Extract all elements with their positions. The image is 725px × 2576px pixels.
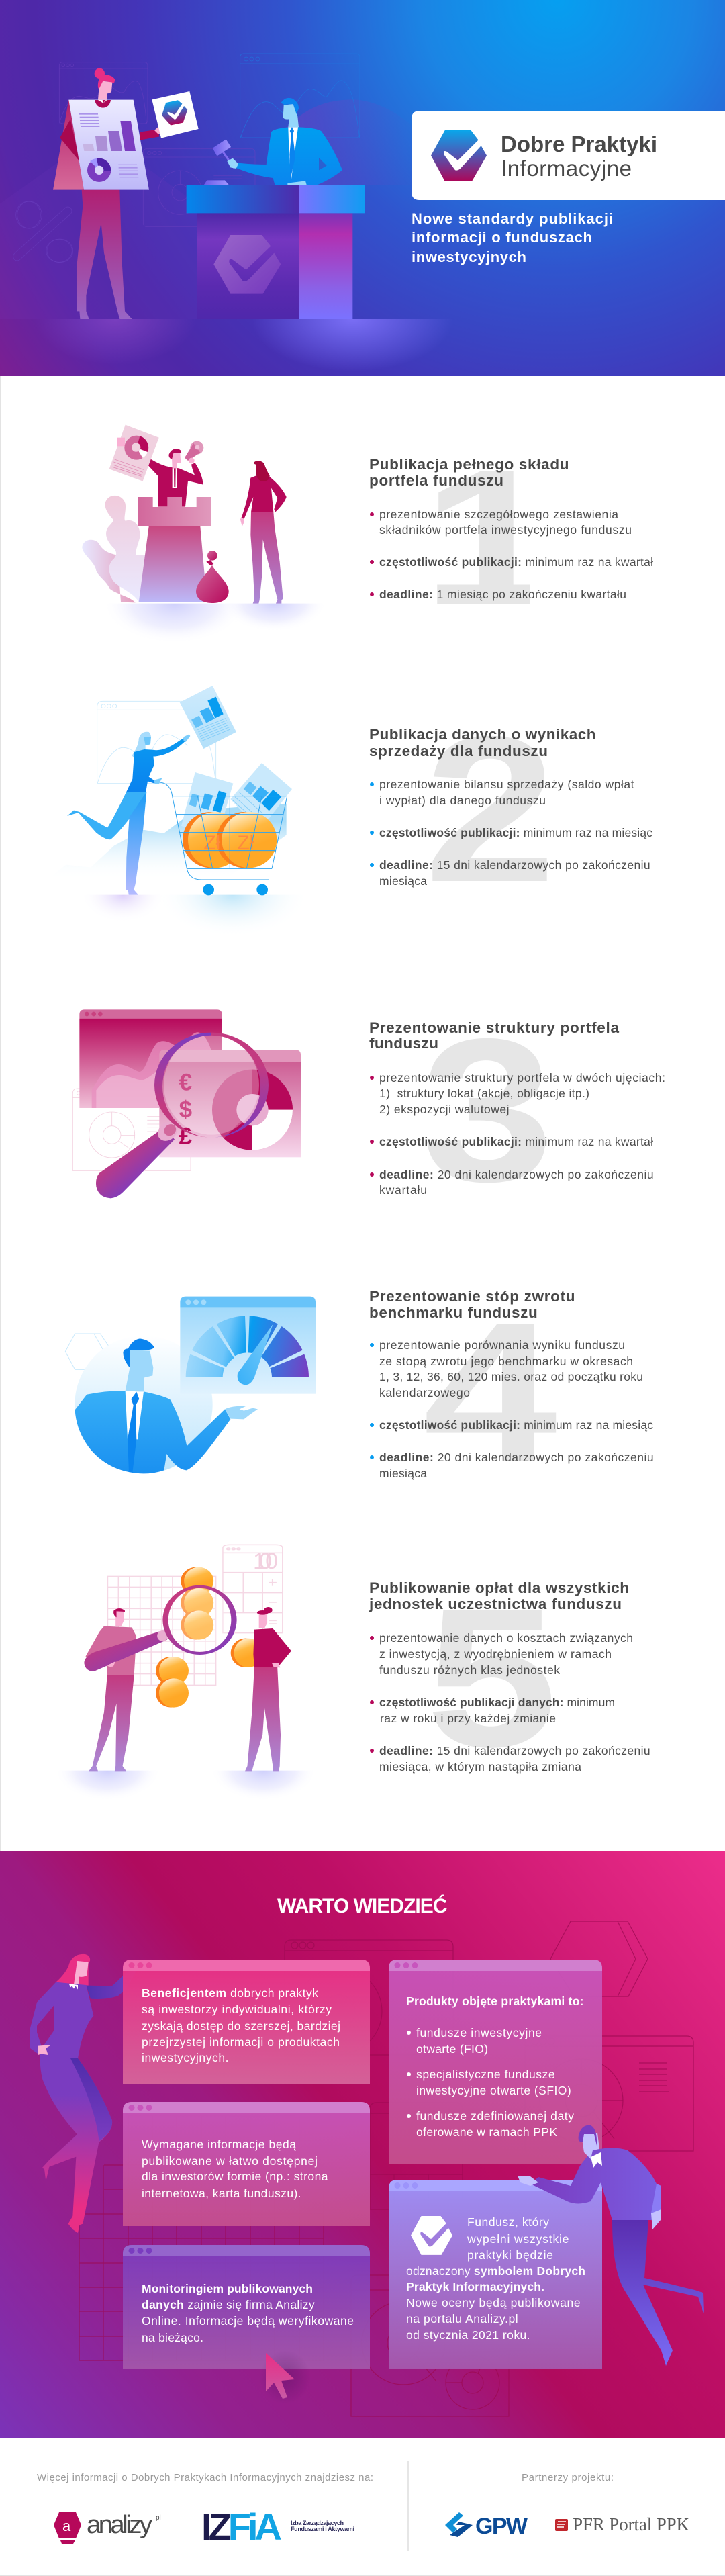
card: produkty: inwestycyjne otwarte (SFIO) xyxy=(416,2084,571,2097)
floor glow xyxy=(124,603,311,633)
tower xyxy=(139,526,207,602)
text: section 3: funduszu xyxy=(369,1035,438,1052)
logo: gpw: GPW xyxy=(475,2514,528,2539)
speaker xyxy=(148,459,203,507)
card: wymagane informacje: internetowa, karta funduszu). xyxy=(142,2187,301,2200)
badge card xyxy=(152,91,199,138)
gauge window xyxy=(180,1297,316,1308)
card: beneficjentem: zyskają dostęp do szerszej, bardziej xyxy=(142,2019,340,2033)
text: section 5: częstotliwość publikacji danych: minimum xyxy=(379,1696,615,1709)
card: symbol: od stycznia 2021 roku. xyxy=(406,2328,530,2342)
text: section 2: częstotliwość publikacji: minimum raz na miesiąc xyxy=(379,826,652,839)
text: section 5: raz w roku i przy każdej zmianie xyxy=(380,1712,556,1725)
text: section 2: prezentowanie bilansu sprzedaży (saldo wpłat xyxy=(379,778,634,791)
text: section 1: prezentowanie szczegółowego zestawienia xyxy=(379,508,618,521)
footer text left: Więcej informacji o Dobrych Praktykach Informacyjnych znajdziesz na: xyxy=(37,2472,373,2483)
cart xyxy=(159,782,287,880)
logo wordmark xyxy=(501,132,657,181)
card: symbol xyxy=(389,2180,602,2369)
calculator value: 100 xyxy=(253,1549,278,1574)
illustration: man with gauge xyxy=(65,1297,316,1473)
text: section 4: Prezentowanie stóp zwrotu xyxy=(369,1288,575,1305)
text: section 3: deadline: 20 dni kalendarzowych po zakończeniu xyxy=(379,1168,654,1181)
lens glass xyxy=(164,1036,259,1135)
man xyxy=(126,1350,153,1391)
text: section 3: częstotliwość publikacji: minimum raz na kwartał xyxy=(379,1135,653,1148)
text: section 3: kwartału xyxy=(379,1183,427,1197)
logo: izfia: IZFiA xyxy=(201,2505,282,2548)
logo: izfia: Funduszami i Aktywami xyxy=(291,2526,354,2532)
text: section 1: Publikacja pełnego składu xyxy=(369,456,569,473)
text: section 1 xyxy=(369,456,653,601)
coins xyxy=(181,1567,211,1595)
floor glow xyxy=(98,894,282,923)
panel: warto wiedzieć xyxy=(0,1851,725,2438)
text: section 5: z inwestycją, z wyodrębnieniem w ramach xyxy=(379,1647,612,1661)
card: beneficjentem: inwestycyjnych. xyxy=(142,2051,228,2064)
donut window xyxy=(159,1050,301,1062)
floor glow xyxy=(56,319,440,364)
card: symbol: Fundusz, który xyxy=(467,2215,549,2229)
logo wordmark: Informacyjne xyxy=(501,156,632,181)
logo: izfia xyxy=(201,2505,354,2548)
text: section 5: deadline: 15 dni kalendarzowych po zakończeniu xyxy=(379,1744,650,1757)
footer text right: Partnerzy projektu: xyxy=(522,2472,614,2483)
card: produkty xyxy=(389,1960,602,2164)
numeral 3: 3 xyxy=(422,996,554,1224)
text: section 2 xyxy=(369,726,652,888)
numeral 5: 5 xyxy=(426,1567,558,1788)
text: section 5: prezentowanie danych o kosztach związanych xyxy=(379,1631,633,1645)
card: produkty: fundusze zdefiniowanej daty xyxy=(416,2109,574,2123)
logo: analizy: a xyxy=(62,2518,71,2534)
text: section 1: składników portfela inwestycyjnego funduszu xyxy=(379,523,632,537)
outline window xyxy=(72,1089,191,1170)
heading: WARTO WIEDZIEĆ xyxy=(277,1894,447,1917)
cursor icon xyxy=(260,2350,311,2404)
text: section 5 xyxy=(369,1579,650,1774)
chart window xyxy=(79,1009,222,1019)
currency symbols: £ xyxy=(179,1123,193,1149)
card: symbol: Nowe oceny będą publikowane xyxy=(406,2296,581,2309)
logo: analizy: analizy xyxy=(87,2511,152,2539)
logo: izfia: Izba Zarządzających xyxy=(291,2520,344,2526)
currency symbols: $ xyxy=(179,1097,192,1123)
card: beneficjentem: Beneficjentem dobrych praktyk xyxy=(142,1986,318,2000)
card: produkty: fundusze inwestycyjne xyxy=(416,2026,542,2039)
illustration: two people inspecting coins xyxy=(54,1545,317,1801)
panel: footer xyxy=(0,2461,725,2576)
hero subtitle xyxy=(412,210,613,265)
outline grid xyxy=(107,1576,216,1685)
text: section 5: jednostek uczestnictwa funduszu xyxy=(369,1596,622,1612)
logo: pfr portal ppk: PFR Portal PPK xyxy=(573,2514,690,2534)
money bag xyxy=(207,551,218,561)
text: section 1: deadline: 1 miesiąc po zakończeniu kwartału xyxy=(379,588,626,601)
text: section 3: 2) ekspozycji walutowej xyxy=(379,1103,509,1116)
text: section 3 xyxy=(369,1019,665,1197)
text: section 4: 1, 3, 12, 36, 60, 120 mies. oraz od początku roku xyxy=(379,1370,643,1383)
illustration: magnifier over windows xyxy=(72,1009,301,1198)
text: section 5: Publikowanie opłat dla wszystkich xyxy=(369,1579,629,1596)
floating sheet xyxy=(180,686,236,749)
card: symbol: wypełni wszystkie xyxy=(467,2232,569,2246)
card: produkty: Produkty objęte praktykami to: xyxy=(406,1994,584,2008)
illustration: woman with shopping cart xyxy=(42,686,309,937)
card: symbol: Praktyk Informacyjnych. xyxy=(406,2280,544,2293)
magnifier xyxy=(84,1631,167,1671)
calculator window xyxy=(223,1545,283,1633)
card: symbol: na portalu Analizy.pl xyxy=(406,2312,518,2326)
text: section 4: prezentowanie porównania wyniku funduszu xyxy=(379,1338,625,1352)
text: section 4: deadline: 20 dni kalendarzowych po zakończeniu xyxy=(379,1451,654,1464)
shopper xyxy=(132,732,151,759)
hero subtitle: inwestycyjnych xyxy=(412,248,526,265)
man xyxy=(89,1675,134,1771)
text: section 1: portfela funduszu xyxy=(369,472,503,489)
card: wymagane informacje: dla inwestorów formie (np.: strona xyxy=(142,2170,328,2183)
logo: analizy: pl xyxy=(156,2514,161,2522)
card: monitoring: danych zajmie się firma Analizy xyxy=(142,2298,315,2311)
background window xyxy=(97,701,216,784)
woman xyxy=(245,1667,281,1771)
text: section 4 xyxy=(369,1288,654,1480)
logo: analizy xyxy=(54,2511,161,2544)
card: produkty: oferowane w ramach PPK xyxy=(416,2125,557,2139)
card: produkty: specjalistyczne fundusze xyxy=(416,2068,555,2081)
card: monitoring: Monitoringiem publikowanych xyxy=(142,2282,313,2295)
icon: white badge xyxy=(411,2216,452,2255)
card: beneficjentem xyxy=(123,1960,370,2084)
illustration: tower with speaker xyxy=(82,425,327,644)
text: section 4: częstotliwość publikacji: minimum raz na miesiąc xyxy=(379,1418,653,1432)
coins xyxy=(183,812,239,868)
card: monitoring: na bieżąco. xyxy=(142,2331,203,2344)
figure: man with gavel xyxy=(213,98,342,185)
card: monitoring: Online. Informacje będą weryfikowane xyxy=(142,2314,354,2328)
text: section 4: ze stopą zwrotu jego benchmarku w okresach xyxy=(379,1354,633,1368)
text: section 3: Prezentowanie struktury portfela xyxy=(369,1019,619,1036)
card: monitoring xyxy=(123,2245,370,2369)
text: section 2: Publikacja danych o wynikach xyxy=(369,726,596,743)
text: section 3: 1) struktury lokat (akcje, obligacje itp.) xyxy=(379,1087,589,1100)
card: wymagane informacje: publikowane w łatwo dostępnej xyxy=(142,2154,318,2168)
page edge xyxy=(0,376,1,1851)
hero background outlines xyxy=(0,54,421,319)
numeral 4: 4 xyxy=(423,1281,559,1503)
card: beneficjentem: są inwestorzy indywidualni, którzy xyxy=(142,2003,332,2016)
text: section 2: sprzedaży dla funduszu xyxy=(369,743,548,760)
hero subtitle: Nowe standardy publikacji xyxy=(412,210,613,227)
figure: woman xyxy=(30,1954,138,2233)
currency symbols xyxy=(179,1069,193,1149)
text: section 4: kalendarzowego xyxy=(379,1386,470,1399)
text: section 2: deadline: 15 dni kalendarzowych po zakończeniu xyxy=(379,858,650,872)
text: section 2: miesiąca xyxy=(379,874,427,888)
lens ring xyxy=(154,1033,269,1138)
icon: logo hexagon xyxy=(431,130,487,181)
card: symbol: odznaczony symbolem Dobrych xyxy=(406,2264,585,2278)
figure: man xyxy=(518,2125,704,2366)
background outlines xyxy=(79,1921,693,2416)
text: section 3: prezentowanie struktury portfela w dwóch ujęciach: xyxy=(379,1071,665,1085)
text: section 4: miesiąca xyxy=(379,1467,427,1480)
numeral 2: 2 xyxy=(424,694,557,925)
card: symbol: praktyki będzie xyxy=(467,2248,553,2262)
illustration: woman with shopping cart: Zł xyxy=(203,832,221,854)
floor glow xyxy=(70,1770,302,1792)
report sheet xyxy=(68,100,149,190)
magnifier handle xyxy=(96,1127,175,1198)
card: wymagane informacje xyxy=(123,2102,370,2226)
numeral 1: 1 xyxy=(422,429,559,646)
logo: gpw xyxy=(445,2512,528,2539)
currency symbols: € xyxy=(179,1069,192,1095)
logo wordmark: Dobre Praktyki xyxy=(501,132,657,156)
card: beneficjentem: przejrzystej informacji o produktach xyxy=(142,2035,340,2049)
illustration: woman with shopping cart: Zł xyxy=(237,832,254,854)
podium xyxy=(187,180,365,319)
card: produkty: otwarte (FIO) xyxy=(416,2042,488,2056)
hero subtitle: informacji o funduszach xyxy=(412,229,592,246)
panel: hero header xyxy=(0,0,725,376)
card: wymagane informacje: Wymagane informacje będą xyxy=(142,2137,296,2151)
text: section 5: miesiąca, w którym nastąpiła zmiana xyxy=(379,1760,581,1774)
figure: woman with report xyxy=(53,68,199,319)
logo box xyxy=(412,111,725,200)
text: section 1: częstotliwość publikacji: minimum raz na kwartał xyxy=(379,555,653,569)
text: section 5: funduszu różnych klas jednostek xyxy=(379,1663,560,1677)
basket sheets xyxy=(181,772,233,839)
woman xyxy=(250,512,283,604)
text: section 4: benchmarku funduszu xyxy=(369,1304,538,1321)
text: section 2: i wypłat) dla danego funduszu xyxy=(379,794,546,807)
